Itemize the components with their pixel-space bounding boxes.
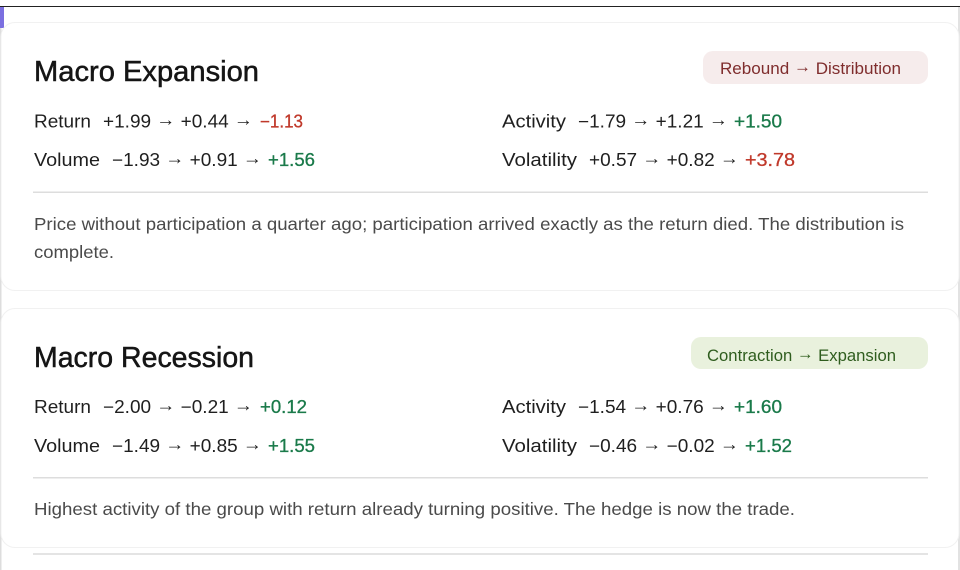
heading: Macro Expansion: Macro Expansion: [34, 56, 259, 88]
metric: Volatility: +0.57: [589, 150, 635, 170]
commentary text: Price without participation a quarter ago; participation arrived exactly as the return died. The distribution is: [34, 214, 904, 234]
metric: Volatility: +0.82: [661, 150, 720, 170]
metric: Activity: →: [631, 395, 650, 415]
metric: Volume: −1.93: [112, 150, 158, 170]
metric: Return: −1.13: [260, 112, 303, 132]
metric: Activity: +0.76: [650, 397, 709, 417]
metric: Volume: [34, 148, 315, 170]
metric: Return: →: [234, 110, 253, 130]
metric: Volatility: →: [720, 434, 739, 454]
metric: Volatility: −0.46: [589, 436, 635, 456]
metric: Activity: −1.79: [578, 112, 624, 132]
metric: Volume: →: [243, 434, 262, 454]
metric: Volatility: Volatility: [502, 150, 577, 170]
panel: Macro Expansion: [1, 22, 959, 290]
status pill: Rebound to Distribution: Distribution: [811, 60, 901, 78]
metric: Activity: +1.60: [734, 397, 782, 417]
commentary text: Highest activity of the group with return already turning positive. The hedge is now the trade.: [34, 499, 795, 519]
metric: Volatility: +1.52: [745, 436, 792, 456]
metric: Activity: Activity: [502, 397, 566, 417]
status pill: Contraction to Expansion: →: [797, 345, 814, 363]
metric: Return: →: [156, 110, 175, 130]
metric: Return: →: [234, 395, 253, 415]
metric: Return: Return: [34, 112, 91, 132]
metric: Activity: Activity: [502, 112, 566, 132]
metric: Volume: →: [165, 434, 184, 454]
metric: Activity: [502, 395, 782, 417]
metric: Volatility: [502, 148, 795, 170]
metric: Volume: +0.85: [184, 436, 243, 456]
metric: Return: [34, 395, 307, 417]
commentary text: complete.: [34, 242, 114, 262]
metric: Volatility: [502, 434, 792, 456]
status pill: Rebound to Distribution: Rebound: [720, 60, 787, 78]
metric: Activity: →: [631, 110, 650, 130]
metric: Volume: →: [243, 148, 262, 168]
metric: Return: −0.21: [175, 397, 234, 417]
metric: Volume: Volume: [34, 150, 100, 170]
metric: Volume: +1.56: [268, 150, 315, 170]
metric: Volatility: →: [642, 148, 661, 168]
metric: Volatility: Volatility: [502, 436, 577, 456]
status pill: Contraction to Expansion: Contraction: [707, 347, 791, 365]
metric: Activity: →: [709, 110, 728, 130]
metric: Return: +0.44: [175, 112, 234, 132]
metric: Activity: +1.21: [650, 112, 709, 132]
metric: Return: +1.99: [103, 112, 149, 132]
metric: Volume: −1.49: [112, 436, 158, 456]
status pill: Contraction to Expansion: [691, 337, 928, 369]
metric: Volume: →: [165, 148, 184, 168]
status pill: Rebound to Distribution: →: [794, 58, 811, 76]
metric: Activity: →: [709, 395, 728, 415]
panel: Macro Recession: [1, 308, 959, 548]
metric: Volatility: +3.78: [745, 150, 795, 170]
metric: Volatility: −0.02: [661, 436, 720, 456]
metric: Volume: [34, 434, 315, 456]
metric: Volatility: →: [642, 434, 661, 454]
metric: Volume: +1.55: [268, 436, 315, 456]
metric: Return: →: [156, 395, 175, 415]
commentary text: [34, 214, 904, 262]
metric: Volume: +0.91: [184, 150, 243, 170]
metric: Return: +0.12: [260, 397, 307, 417]
metric: Activity: −1.54: [578, 397, 624, 417]
purple corner marker: [0, 7, 4, 28]
heading: Macro Recession: Macro Recession: [34, 342, 254, 374]
status pill: Rebound to Distribution: [703, 51, 928, 84]
metric: Volatility: →: [720, 148, 739, 168]
metric: Return: −2.00: [103, 397, 149, 417]
metric: Return: Return: [34, 397, 91, 417]
status pill: Contraction to Expansion: Expansion: [814, 347, 896, 365]
metric: Volume: Volume: [34, 436, 100, 456]
metric: Return: [34, 110, 303, 132]
metric: Activity: [502, 110, 782, 132]
metric: Activity: +1.50: [734, 112, 782, 132]
